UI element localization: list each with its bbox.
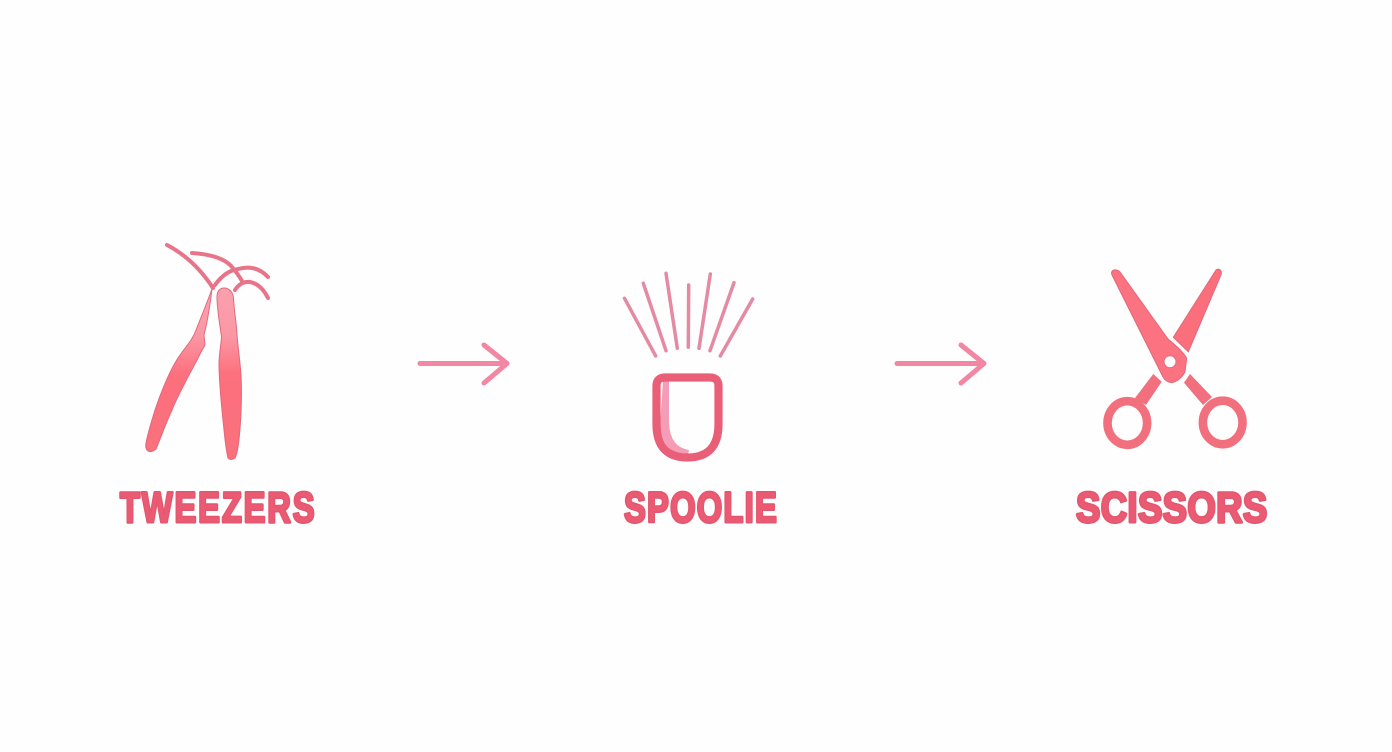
- step 2: spoolie: [624, 273, 777, 532]
- spoolie: shield head: [656, 378, 718, 458]
- spoolie: pale inner band: [660, 381, 689, 455]
- label: scissors: SCISSORS: [1076, 484, 1267, 532]
- step 3: scissors: [1076, 269, 1267, 532]
- label: spoolie: SPOOLIE: [624, 484, 777, 532]
- icon: spoolie: [624, 273, 753, 458]
- scissors: left handle: [1108, 374, 1162, 445]
- tweezers: left blade: [146, 289, 212, 452]
- scissors: left blade with pivot: [1112, 270, 1187, 383]
- arrow: tweezers to spoolie: [420, 345, 507, 383]
- tweezers: upper curved tips: [167, 245, 268, 298]
- label: tweezers: TWEEZERS: [120, 484, 315, 532]
- scissors: right handle: [1184, 374, 1242, 444]
- icon: scissors: [1108, 269, 1242, 445]
- icon: tweezers: [146, 245, 268, 460]
- tweezers: right blade: [217, 288, 241, 460]
- spoolie: bristles: [624, 273, 753, 356]
- arrow: spoolie to scissors: [897, 345, 984, 383]
- step 1: tweezers: [120, 245, 315, 532]
- scissors: right blade: [1173, 269, 1221, 352]
